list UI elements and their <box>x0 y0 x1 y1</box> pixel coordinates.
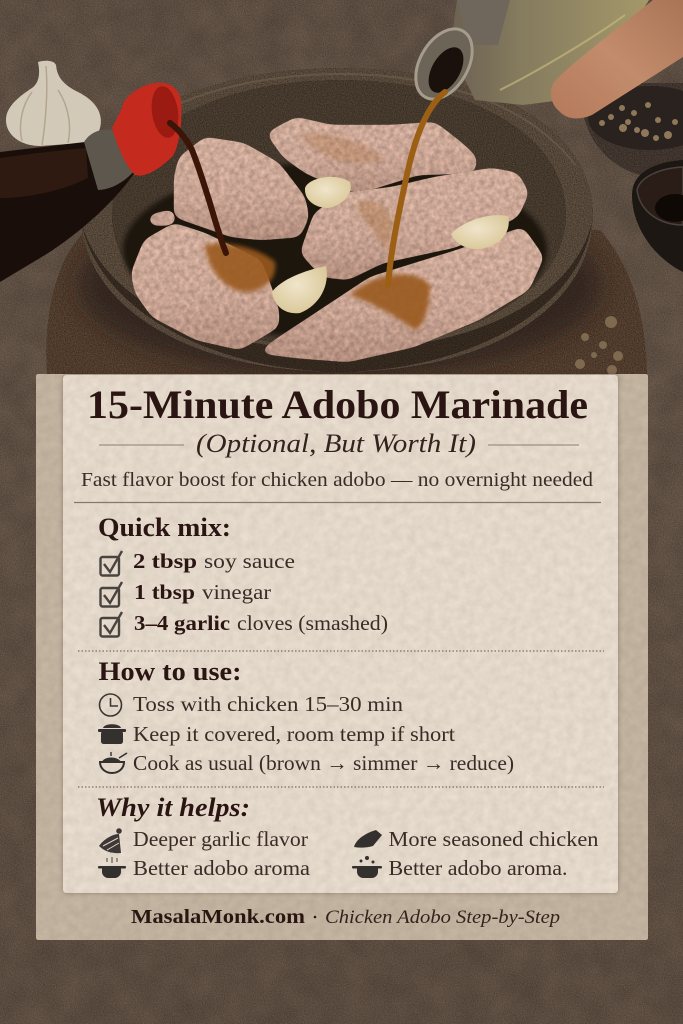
item: soy sauce <box>100 549 295 576</box>
icon: checkbox <box>100 612 122 636</box>
icon: whisk <box>99 828 122 853</box>
soy sauce bottle <box>0 83 181 282</box>
garlic bulb <box>6 61 101 146</box>
footer credit: MasalaMonk.com <box>131 906 305 928</box>
chicken pieces <box>131 117 544 362</box>
icon: chicken piece <box>354 830 382 848</box>
icon: steaming pot with herbs <box>352 856 382 878</box>
garlic cloves <box>272 177 509 313</box>
icon: steaming pot <box>98 857 126 878</box>
dark marinade pool <box>123 162 547 338</box>
icon: checkbox <box>100 551 122 576</box>
soy stains on chicken <box>205 134 430 330</box>
footer credit <box>131 906 560 928</box>
heading: why it helps: Why it helps: <box>96 793 250 822</box>
heading: how to use: How to use: <box>98 657 242 686</box>
icon: clock <box>100 694 122 716</box>
panel: outer parchment card <box>36 374 648 940</box>
heading: quick mix: Quick mix: <box>98 513 231 542</box>
soy sauce stream <box>170 123 226 253</box>
section: quick mix <box>98 513 388 636</box>
item: cook: Cook as usual (brown → simmer → reduce) <box>133 751 514 775</box>
section: why it helps <box>96 793 599 880</box>
stone bowl <box>81 68 593 372</box>
footer credit: Chicken Adobo Step-by-Step <box>325 907 560 928</box>
icon: steaming bowl <box>100 752 127 773</box>
item: garlic: cloves (smashed) <box>237 611 388 635</box>
item: vinegar: 1 tbsp <box>134 580 195 604</box>
item: toss: Toss with chicken 15–30 min <box>133 692 404 716</box>
item: vinegar <box>100 580 271 606</box>
subtitle with side rules: (Optional, But Worth It) <box>196 429 476 458</box>
item: deeper garlic flavor: Deeper garlic flavor <box>133 827 308 851</box>
wooden board <box>46 230 647 375</box>
item: better adobo aroma left: Better adobo aroma <box>133 856 311 880</box>
small dark sauce bowl <box>632 160 683 272</box>
hand finger <box>551 0 683 118</box>
item: garlic: 3–4 garlic <box>134 611 230 635</box>
item: vinegar: vinegar <box>202 580 271 604</box>
tagline: Fast flavor boost for chicken adobo — no overnight needed <box>81 469 593 491</box>
icon: checkbox <box>100 582 122 606</box>
vinegar stream <box>388 92 445 285</box>
panel: inner recipe card <box>63 375 618 893</box>
item: soy sauce: 2 tbsp <box>133 549 197 573</box>
item: keep covered: Keep it covered, room temp if short <box>133 722 455 746</box>
item: better adobo aroma right: Better adobo aroma. <box>388 856 568 880</box>
vinegar bottle <box>404 0 649 109</box>
title: 15-Minute Adobo Marinade <box>87 382 588 427</box>
bowl shadow <box>78 193 602 377</box>
item: more seasoned chicken: More seasoned chicken <box>388 827 599 851</box>
scattered peppercorns <box>575 316 623 375</box>
item: garlic <box>100 611 388 636</box>
item: soy sauce: soy sauce <box>204 549 295 573</box>
section: how to use <box>98 657 514 775</box>
peppercorn bowl <box>583 83 683 178</box>
photo: marinating chicken in bowl <box>0 0 683 377</box>
icon: covered pot <box>98 724 126 744</box>
